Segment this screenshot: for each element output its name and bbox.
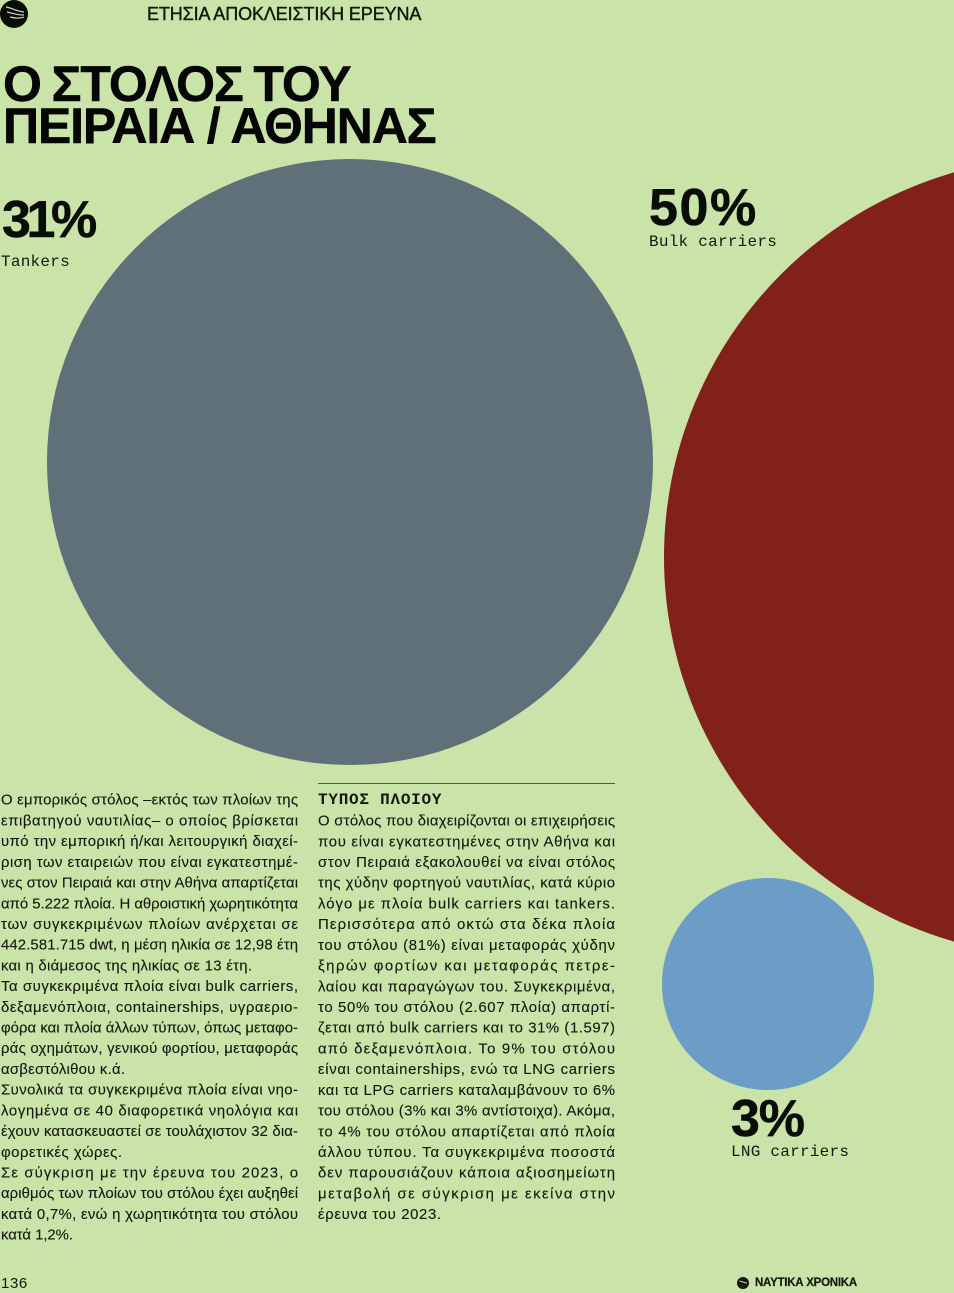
text block: fleet overview: κατά 0,7%, ενώ η χωρητικότητα του στόλου	[1, 1207, 298, 1223]
label: Tankers: Tankers	[1, 253, 70, 271]
text block: fleet overview: φόρα και πλοία άλλων τύπων, όπως μεταφο-	[1, 1020, 298, 1036]
text block: fleet overview: επιβατηγού ναυτιλίας– ο οποίος βρίσκεται	[1, 813, 298, 829]
text block: fleet overview: Ο εμπορικός στόλος –εκτός των πλοίων της	[1, 793, 298, 809]
value: 3%: 3%	[731, 1090, 804, 1148]
circle: tankers 31%	[47, 159, 653, 765]
text block: ship type: Ο στόλος που διαχειρίζονται οι επιχειρήσεις	[318, 814, 615, 830]
text block: fleet overview: Σε σύγκριση με την έρευνα του 2023, ο	[1, 1166, 298, 1182]
text block: fleet overview	[1, 793, 299, 1244]
text block: ship type: λαίου και παραγώγων του. Συγκεκριμένα,	[318, 979, 615, 995]
label: Bulk carriers: Bulk carriers	[649, 233, 777, 251]
text block: fleet overview: υπό την εμπορική ή/και λειτουργική διαχεί-	[1, 834, 298, 850]
text block: fleet overview: αριθμός των πλοίων του στόλου έχει αυξηθεί	[1, 1186, 299, 1202]
icon: publisher logo	[0, 0, 28, 28]
text block: ship type: το 50% του στόλου (2.607 πλοία) απαρτί-	[318, 1000, 615, 1016]
text block: fleet overview: νες στον Πειραιά και στην Αθήνα απαρτίζεται	[1, 876, 298, 892]
title: ΠΕΙΡΑΙΑ / ΑΘΗΝΑΣ	[3, 98, 436, 154]
divider rule	[318, 783, 615, 784]
title	[3, 56, 436, 154]
text block: fleet overview: λογημένα σε 40 διαφορετικά νηολόγια και	[1, 1103, 298, 1119]
text block: fleet overview: Τα συγκεκριμένα πλοία είναι bulk carriers,	[1, 979, 298, 995]
label: LNG carriers: LNG carriers	[731, 1143, 849, 1161]
text block: ship type	[318, 814, 615, 1223]
value: 31%: 31%	[2, 191, 93, 249]
text block: fleet overview: Συνολικά τα συγκεκριμένα πλοία είναι νηο-	[1, 1083, 298, 1099]
text block: fleet overview: ράς οχημάτων, γενικού φορτίου, μεταφοράς	[1, 1041, 298, 1057]
heading: ship type: ΤΥΠΟΣ ΠΛΟΙΟΥ	[318, 791, 442, 809]
text block: fleet overview: και η διάμεσος της ηλικίας σε 13 έτη.	[1, 958, 252, 974]
stat: bulk carriers	[649, 179, 777, 251]
text block: ship type: έρευνα του 2023.	[318, 1207, 441, 1223]
text block: ship type: του στόλου (3% και 3% αντίστοιχα). Ακόμα,	[318, 1104, 615, 1120]
text block: ship type: δεν παρουσιάζουν κάποια αξιοσημείωτη	[318, 1166, 615, 1182]
value: 50%: 50%	[649, 179, 758, 237]
page number: 136	[1, 1275, 28, 1292]
text block: fleet overview: δεξαμενόπλοια, containerships, υγραεριο-	[1, 1000, 298, 1016]
circle: LNG carriers 3%	[662, 878, 874, 1090]
text block: ship type: της χύδην φορτηγού ναυτιλίας, κατά κύριο	[318, 876, 615, 892]
text block: ship type: που είναι εγκατεστημένες στην Αθήνα και	[318, 834, 615, 850]
text block: ship type: άλλου τύπου. Τα συγκεκριμένα ποσοστά	[318, 1145, 615, 1161]
title: Ο ΣΤΟΛΟΣ ΤΟΥ	[3, 56, 350, 112]
text block: ship type: από δεξαμενόπλοια. Το 9% του στόλου	[318, 1041, 615, 1057]
stat: tankers	[1, 191, 96, 271]
text block: ship type: ζεται από bulk carriers και το 31% (1.597)	[318, 1021, 615, 1037]
circle: bulk carriers 50%	[664, 157, 954, 957]
text block: fleet overview: 442.581.715 dwt, η μέση ηλικία σε 12,98 έτη	[1, 938, 298, 954]
stat: LNG carriers	[731, 1090, 849, 1161]
header label: ΕΤΗΣΙΑ ΑΠΟΚΛΕΙΣΤΙΚΗ ΕΡΕΥΝΑ	[147, 4, 421, 24]
text block: ship type: ξηρών φορτίων και μεταφοράς πετρε-	[318, 959, 615, 975]
text block: ship type: του στόλου (81%) είναι μεταφοράς χύδην	[318, 938, 615, 954]
text block: fleet overview: ασβεστόλιθου κ.ά.	[1, 1062, 125, 1078]
text block: fleet overview: από 5.222 πλοία. Η αθροιστική χωρητικότητα	[1, 896, 298, 912]
icon: footer logo	[737, 1277, 749, 1289]
text block: fleet overview: κατά 1,2%.	[1, 1228, 73, 1244]
text block: ship type: και τα LPG carriers καταλαμβάνουν το 6%	[318, 1083, 615, 1099]
text block: ship type: μεταβολή σε σύγκριση με εκείνα στην	[318, 1186, 615, 1202]
text block: fleet overview: έχουν κατασκευαστεί σε τουλάχιστον 32 δια-	[1, 1124, 298, 1140]
text block: fleet overview: φορετικές χώρες.	[1, 1145, 122, 1161]
text block: ship type: Περισσότερα από οκτώ στα δέκα πλοία	[318, 917, 615, 933]
text block: ship type: στον Πειραιά εξακολουθεί να είναι στόλος	[318, 855, 615, 871]
text block: ship type: είναι containerships, ενώ τα LNG carriers	[318, 1062, 615, 1078]
text block: ship type: το 4% του στόλου απαρτίζεται από πλοία	[318, 1124, 615, 1140]
footer brand: ΝΑΥΤΙΚΑ ΧΡΟΝΙΚΑ	[755, 1277, 857, 1289]
text block: fleet overview: ριση των εταιρειών που είναι εγκατεστημέ-	[1, 855, 298, 871]
text block: ship type: λόγο με πλοία bulk carriers και tankers.	[318, 896, 615, 912]
text block: fleet overview: των συγκεκριμένων πλοίων ανέρχεται σε	[1, 917, 298, 933]
